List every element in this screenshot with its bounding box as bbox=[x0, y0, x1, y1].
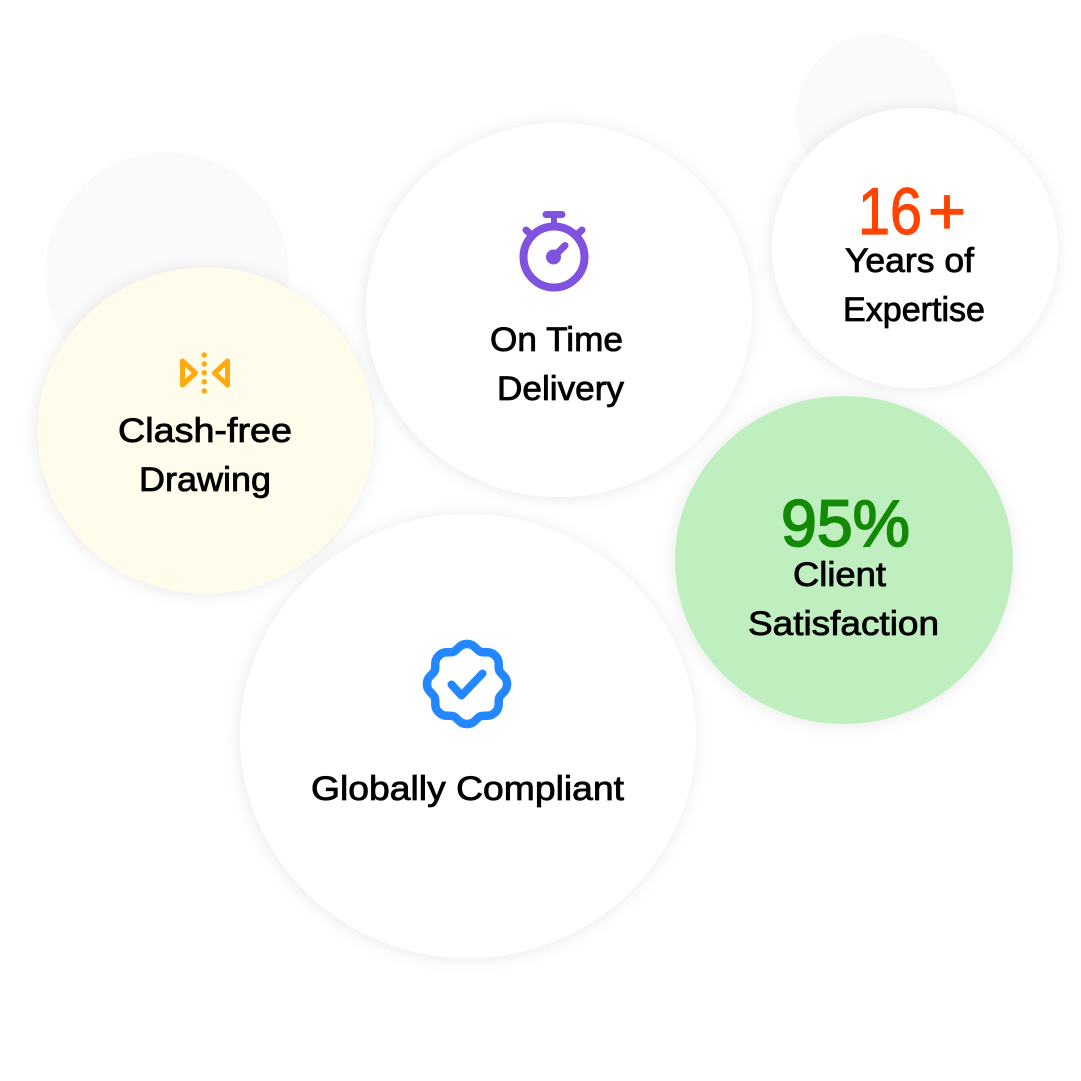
label: Client Satisfaction bbox=[748, 556, 939, 643]
label: Client Satisfaction: Satisfaction bbox=[748, 605, 939, 643]
stat: 16+: 16 bbox=[858, 174, 922, 248]
icon: verified badge bbox=[419, 636, 515, 732]
background circle: top right grey bbox=[796, 34, 958, 196]
label: Years of Expertise: Years of bbox=[845, 242, 975, 280]
panel: globally compliant bbox=[240, 514, 696, 958]
label: Clash-free Drawing bbox=[118, 412, 292, 499]
background circle: left grey bbox=[45, 152, 289, 396]
panel: on time delivery bbox=[366, 123, 752, 497]
panel: years of expertise bbox=[772, 108, 1058, 388]
label: On Time Delivery bbox=[490, 321, 624, 408]
stat: 16+: + bbox=[928, 174, 966, 248]
label: Client Satisfaction: Client bbox=[793, 556, 887, 594]
label: Globally Compliant: Globally Compliant bbox=[311, 770, 625, 808]
label: Years of Expertise bbox=[843, 242, 985, 329]
panel: clash-free drawing bbox=[38, 268, 374, 594]
icon: stopwatch bbox=[524, 214, 584, 288]
stat: 16+ bbox=[858, 174, 966, 248]
label: Clash-free Drawing: Clash-free bbox=[118, 412, 292, 450]
icon: mirrored triangles bbox=[182, 352, 228, 394]
label: On Time Delivery: On Time bbox=[490, 321, 623, 359]
stat: 95%: 95% bbox=[781, 486, 910, 560]
panel: client satisfaction bbox=[675, 396, 1013, 724]
label: On Time Delivery: Delivery bbox=[497, 370, 624, 408]
label: Clash-free Drawing: Drawing bbox=[139, 461, 271, 499]
label: Years of Expertise: Expertise bbox=[843, 291, 985, 329]
